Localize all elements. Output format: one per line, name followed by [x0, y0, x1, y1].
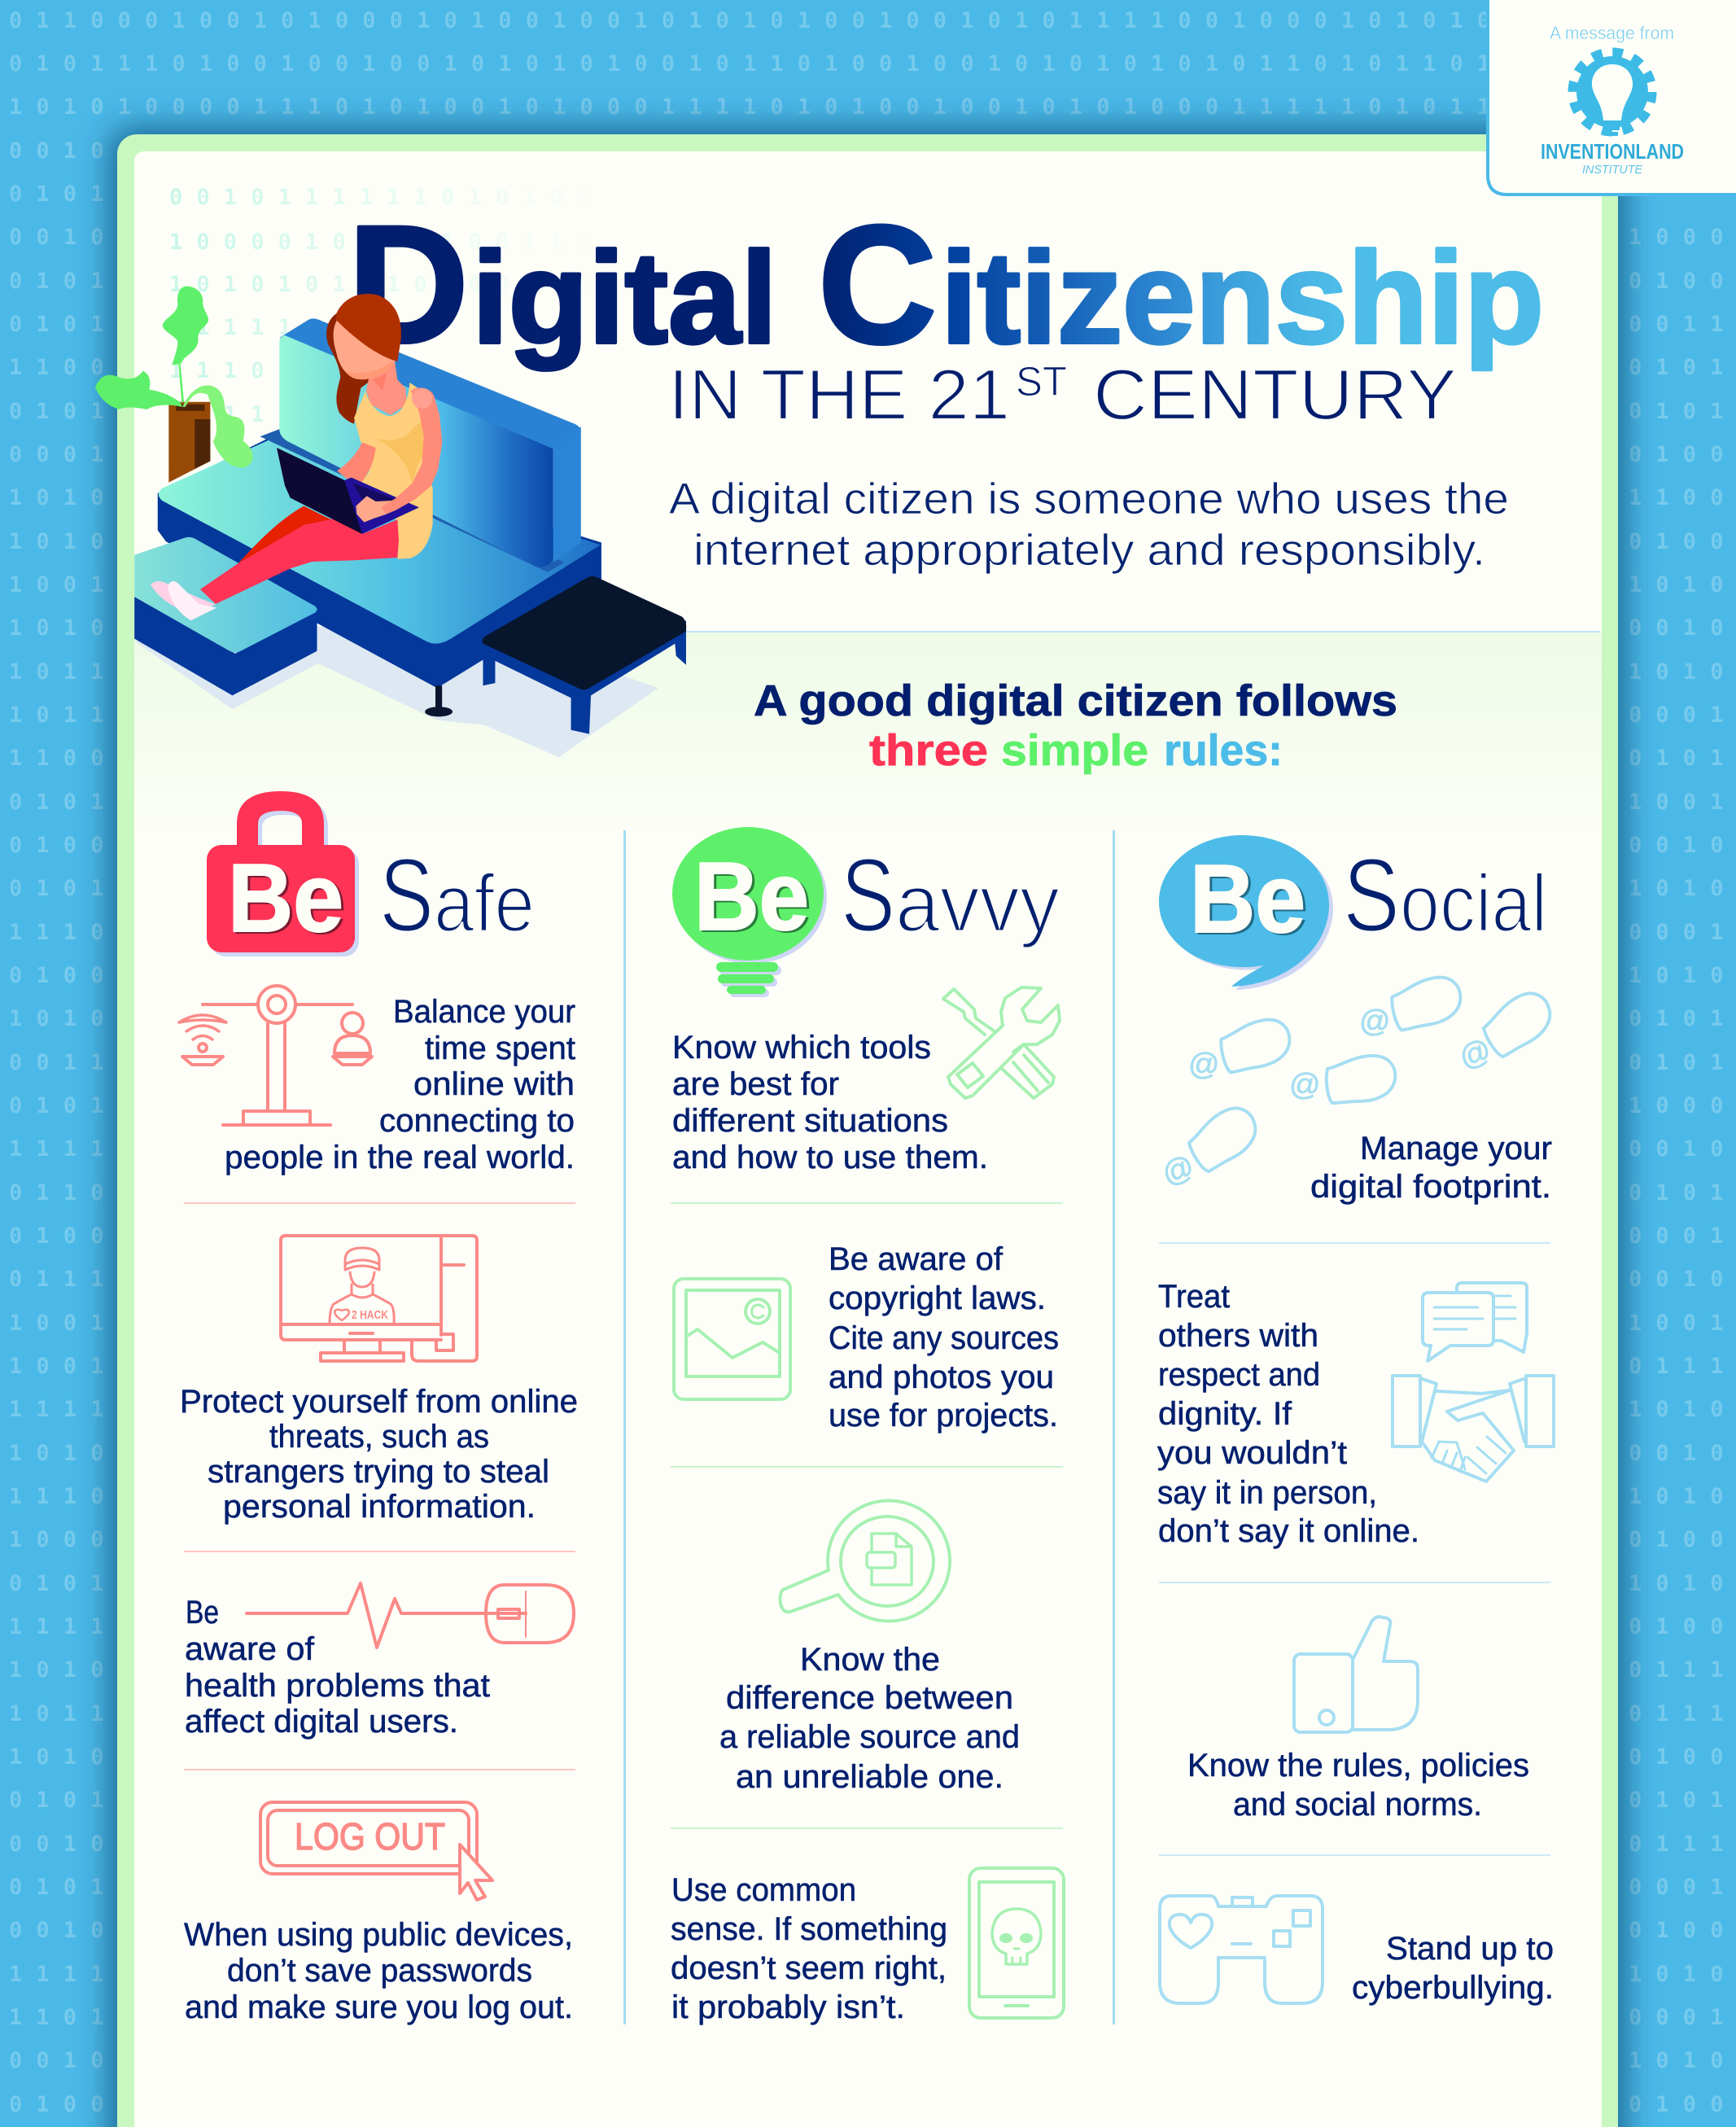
heading: social: ocial [1400, 858, 1547, 949]
binary pattern: right column: 0010 [1629, 615, 1736, 641]
heading: safe: S [379, 838, 434, 954]
panel: be safe [179, 791, 578, 2025]
text: respect [1157, 1279, 1419, 1549]
icon: log out button [260, 1802, 492, 1900]
binary pattern: left column: 0010 [9, 225, 118, 250]
text: copyright: and photos you [829, 1359, 1054, 1395]
binary pattern: left column: 0101 [9, 1571, 118, 1596]
binary pattern: left column: 0100 [9, 1223, 118, 1249]
text: reliable: difference between [726, 1680, 1013, 1716]
binary pattern: right column: 0100 [1629, 1744, 1736, 1770]
binary pattern: right column: 0100 [1629, 1527, 1736, 1552]
subtitle: IN THE 21 [668, 354, 1010, 435]
panel: be savvy [671, 827, 1064, 2025]
rules heading: rules: [1164, 726, 1283, 775]
text: common sense [671, 1872, 947, 2025]
badge: light bulb: Be [694, 842, 809, 951]
text: protect: strangers trying to steal [208, 1454, 549, 1490]
binary pattern: right column: 0101 [1629, 1050, 1736, 1075]
text: protect: personal information. [223, 1489, 536, 1525]
binary pattern: right column: 0101 [1629, 355, 1736, 380]
heading: safe [379, 838, 535, 954]
intro text [669, 475, 1509, 575]
binary pattern: top rows [9, 8, 1504, 120]
text: footprint [1310, 1131, 1552, 1205]
text: health: affect digital users. [185, 1704, 458, 1740]
binary pattern: left column: 1101 [9, 2005, 118, 2030]
text: common sense: Use common [671, 1872, 856, 1908]
binary pattern: left column: 0101 [9, 399, 118, 424]
binary pattern: right column: 1010 [1629, 963, 1736, 988]
icon: thumbs up [1294, 1617, 1418, 1732]
badge: light bulb [672, 827, 827, 997]
binary pattern: right column: 0011 [1629, 312, 1736, 337]
icon: digital footprints: @ [1157, 1149, 1199, 1192]
binary pattern: right column: 1001 [1629, 1311, 1736, 1336]
text: protect: Protect yourself from online [180, 1384, 578, 1420]
text: respect: others with [1158, 1318, 1318, 1354]
icon: hacker monitor [281, 1236, 477, 1361]
binary pattern: left column: 1010 [9, 1441, 118, 1466]
binary pattern: right column: 1000 [1629, 225, 1736, 250]
backrest top [279, 318, 581, 449]
binary pattern: left column: 0011 [9, 1050, 118, 1075]
binary pattern: right column: 0101 [1629, 1006, 1736, 1031]
card inner panel [134, 151, 1602, 2127]
sofa foot [425, 685, 453, 716]
text: respect: dignity. If [1158, 1396, 1292, 1432]
text: log out: When using public devices, [184, 1917, 573, 1953]
binary pattern: right column: 0100 [1629, 1918, 1736, 1943]
badge: lock: Be [228, 844, 343, 952]
binary pattern: right column: 1010 [1629, 659, 1736, 685]
subtitle: CENTURY [1093, 354, 1457, 435]
binary pattern: right column: 1000 [1629, 1093, 1736, 1118]
binary pattern: right column: 0001 [1629, 2005, 1736, 2030]
badge: speech bubble: Be [1190, 845, 1305, 953]
text: copyright: Cite any sources [829, 1320, 1059, 1356]
backrest front [279, 335, 553, 567]
text: tools: and how to use them. [672, 1140, 988, 1175]
binary pattern: left column: 0101 [9, 1093, 118, 1118]
icon: log out button: LOG OUT [295, 1815, 445, 1858]
icon: copyright image [674, 1279, 790, 1399]
binary pattern: top rows: 0110001001010001010010010101010010010101111001000101010 [9, 8, 1504, 33]
binary pattern: right column: 0001 [1629, 702, 1736, 728]
text: reliable: a reliable source and [719, 1719, 1020, 1755]
icon: wrench and screwdriver [943, 987, 1060, 1098]
icon: digital footprints [1157, 974, 1559, 1192]
binary pattern: left column: 1011 [9, 659, 118, 685]
logo box [1488, 0, 1736, 195]
text: respect: say it in person, [1157, 1475, 1377, 1511]
binary pattern: right column: 1010 [1629, 572, 1736, 597]
binary pattern: right column [1629, 225, 1736, 2117]
subtitle [668, 354, 1457, 435]
sofa and furniture [95, 318, 686, 757]
intro text: A digital citizen is someone who uses the [669, 475, 1509, 523]
title: D [348, 190, 469, 379]
heading: social [1343, 838, 1547, 954]
binary pattern: left column: 1001 [9, 1311, 118, 1336]
binary pattern: left column: 1011 [9, 1701, 118, 1727]
binary pattern: left column: 0010 [9, 1832, 118, 1857]
binary pattern: left column: 1000 [9, 1527, 118, 1552]
binary pattern: right column: 0111 [1629, 1701, 1736, 1727]
binary pattern: top rows: 0101110100100100101010100101101001001010101010110101101 [9, 51, 1504, 77]
laptop screen [277, 448, 362, 534]
faint binary pattern in card: 10101010101001010 [169, 272, 632, 297]
binary pattern: left column: 1010 [9, 1006, 118, 1031]
text: cyberbullying: Stand up to [1386, 1931, 1554, 1967]
faint binary pattern in card [169, 185, 713, 427]
faint binary pattern in card: 10110011101 [169, 402, 468, 427]
neck [366, 361, 407, 415]
intro text: internet appropriately and responsibly. [693, 526, 1485, 575]
binary pattern: right column: 0001 [1629, 1223, 1736, 1249]
icon: heartbeat mouse [247, 1583, 574, 1648]
binary pattern: right column: 0100 [1629, 1614, 1736, 1639]
heading: social: S [1343, 838, 1400, 954]
text: cyberbullying: cyberbullying. [1352, 1970, 1554, 2006]
icon: chat bubbles [1423, 1283, 1527, 1361]
binary pattern: right column: 0101 [1629, 746, 1736, 771]
icon: digital footprints: @ [1454, 1033, 1496, 1075]
text: copyright: copyright laws. [829, 1280, 1046, 1316]
binary pattern: left column: 0110 [9, 1180, 118, 1206]
badge: light bulb: Be [697, 844, 811, 952]
binary pattern: left column: 0101 [9, 269, 118, 294]
badge: lock [207, 791, 359, 956]
binary pattern: right column: 0101 [1629, 1180, 1736, 1206]
binary pattern: right column: 0010 [1629, 833, 1736, 858]
ottoman [134, 537, 317, 695]
pot [168, 402, 210, 483]
title [348, 190, 1544, 379]
binary pattern: left column: 0100 [9, 833, 118, 858]
sofa base [158, 434, 601, 688]
column dividers [623, 830, 1115, 2024]
feet [151, 581, 216, 620]
logo institute: INSTITUTE [1582, 163, 1643, 177]
binary pattern: left column: 1100 [9, 746, 118, 771]
binary pattern: left column: 0101 [9, 790, 118, 815]
floor shadow [134, 626, 658, 757]
binary pattern: left column: 0101 [9, 876, 118, 901]
binary pattern: left column: 1111 [9, 1136, 118, 1162]
text: balance: time spent [425, 1031, 575, 1066]
text: footprint: digital footprint. [1310, 1169, 1551, 1205]
badge: lock: Be [230, 846, 346, 954]
binary pattern: left column: 0101 [9, 1788, 118, 1813]
icon: skull tablet [969, 1868, 1064, 2018]
binary pattern: left column: 1010 [9, 1657, 118, 1683]
binary pattern: left column: 0010 [9, 138, 118, 164]
text: respect: you wouldn’t [1157, 1435, 1347, 1471]
icon: balance scale [179, 986, 372, 1125]
text: tools: are best for [672, 1066, 839, 1102]
hair top [336, 294, 401, 361]
binary pattern: right column: 0100 [1629, 529, 1736, 554]
binary pattern: right column: 1100 [1629, 485, 1736, 510]
faint binary pattern in card: 1110100101 [169, 358, 441, 383]
face [334, 320, 396, 379]
binary pattern: right column: 1010 [1629, 1397, 1736, 1422]
binary pattern: left column: 0101 [9, 312, 118, 337]
logo wordmark: INVENTIONLAND [1541, 139, 1684, 164]
far arm [381, 388, 442, 514]
binary pattern: left column: 1111 [9, 1614, 118, 1639]
binary pattern: left column: 1111 [9, 1397, 118, 1422]
binary pattern: left column: 1110 [9, 1484, 118, 1509]
heading: savvy: avvy [895, 858, 1060, 949]
text: reliable: Know the [800, 1642, 940, 1678]
binary pattern: right column: 1010 [1629, 876, 1736, 901]
title: C [818, 190, 937, 379]
text: tools [672, 1030, 988, 1175]
binary pattern: right column: 0101 [1629, 1788, 1736, 1813]
text: norms [1187, 1748, 1529, 1823]
text: respect: respect and [1158, 1357, 1320, 1393]
text: balance: Balance your [393, 994, 575, 1030]
faint binary pattern in card: 00101111110101001110 [169, 185, 713, 210]
binary pattern: right column: 0001 [1629, 1875, 1736, 1900]
text: common sense: it probably isn’t. [671, 1989, 905, 2025]
faint binary pattern in card: 1111101 [169, 315, 360, 340]
text: balance [225, 994, 575, 1175]
binary pattern: left column: 1010 [9, 615, 118, 641]
text: copyright [829, 1241, 1059, 1433]
binary pattern: right column: 0101 [1629, 399, 1736, 424]
heading: savvy [841, 838, 1060, 954]
binary pattern: top rows: 1010100001110101001010001111010100100101010001111101011 [9, 94, 1504, 120]
text: health [185, 1595, 490, 1740]
text: balance: connecting to [379, 1103, 575, 1139]
binary pattern: right column: 1001 [1629, 790, 1736, 815]
binary pattern: left column: 0101 [9, 1875, 118, 1900]
binary pattern: right column: 0111 [1629, 1354, 1736, 1379]
title: itizenship [941, 225, 1544, 370]
text: tools: different situations [672, 1103, 948, 1139]
text: footprint: Manage your [1360, 1131, 1552, 1166]
badge: speech bubble: Be [1192, 847, 1308, 955]
text: protect [180, 1384, 578, 1525]
text: log out: and make sure you log out. [185, 1989, 573, 2025]
binary pattern: right column: 0111 [1629, 1657, 1736, 1683]
binary pattern: left column: 1001 [9, 1354, 118, 1379]
heading: safe: afe [434, 858, 535, 949]
text: common sense: doesn’t seem right, [671, 1950, 947, 1986]
left and right plant leaves [95, 371, 253, 467]
text: protect: threats, such as [269, 1419, 489, 1455]
binary pattern: left column: 0100 [9, 2092, 118, 2117]
binary pattern: right column: 1010 [1629, 1484, 1736, 1509]
text: health: aware of [185, 1631, 315, 1667]
text: health: health problems that [185, 1668, 490, 1704]
binary pattern: right column: 1010 [1629, 1571, 1736, 1596]
binary pattern: left column: 1010 [9, 529, 118, 554]
text: log out: don’t save passwords [227, 1953, 532, 1989]
plant and woman [163, 287, 442, 604]
binary pattern: right column: 0010 [1629, 1267, 1736, 1292]
binary pattern: right column: 0100 [1629, 442, 1736, 467]
text: health: Be [186, 1595, 219, 1630]
icon: digital footprints: @ [1359, 1004, 1391, 1039]
tall leaf [163, 287, 208, 403]
rules heading: simple [1001, 726, 1148, 775]
binary pattern: right column: 0111 [1629, 1832, 1736, 1857]
binary pattern: left column: 1110 [9, 920, 118, 945]
text: norms: and social norms. [1233, 1787, 1482, 1823]
rules heading: three [869, 726, 988, 775]
logo label: A message from [1550, 23, 1674, 43]
binary pattern: right column: 0001 [1629, 920, 1736, 945]
text: log out [184, 1917, 573, 2025]
sofa seat [159, 436, 601, 644]
text: respect: don’t say it online. [1158, 1513, 1419, 1549]
laptop keyboard [344, 478, 419, 534]
rules heading: A good digital citizen follows [754, 676, 1397, 725]
binary pattern: left column: 1111 [9, 1962, 118, 1987]
binary pattern: left column [9, 138, 118, 2117]
icon: hacker monitor: 2 HACK [352, 1308, 388, 1322]
icon: handshake [1393, 1376, 1554, 1481]
icon: magnifier [780, 1500, 950, 1621]
rules heading [754, 676, 1397, 775]
faint binary pattern in card: 10000101001001110010 [169, 230, 713, 255]
heading: savvy: S [841, 838, 895, 954]
binary pattern: right column: 0100 [1629, 2092, 1736, 2117]
binary pattern: right column: 0010 [1629, 1136, 1736, 1162]
icon: game controller [1160, 1896, 1323, 2003]
hand [356, 496, 392, 523]
binary pattern: left column: 0100 [9, 963, 118, 988]
text: tools: Know which tools [672, 1030, 931, 1066]
binary pattern: left column: 0010 [9, 1918, 118, 1943]
badge: speech bubble [1159, 835, 1333, 990]
back hair [326, 313, 372, 424]
binary pattern: right column: 0100 [1629, 269, 1736, 294]
binary pattern: left column: 0111 [9, 1267, 118, 1292]
text: copyright: use for projects. [829, 1398, 1058, 1433]
text: balance: people in the real world. [225, 1140, 575, 1175]
binary pattern: right column: 0010 [1629, 1441, 1736, 1466]
binary pattern: right column: 1010 [1629, 1962, 1736, 1987]
binary pattern: left column: 1011 [9, 702, 118, 728]
dark leg [238, 506, 362, 564]
binary pattern: left column: 0010 [9, 2048, 118, 2073]
near arm [337, 442, 376, 483]
text: respect: Treat [1158, 1279, 1230, 1315]
text: common sense: sense. If something [671, 1911, 947, 1947]
subtitle: ST [1016, 358, 1067, 405]
illustration: woman on sofa [95, 287, 686, 757]
binary pattern: left column: 1001 [9, 572, 118, 597]
panel: be social [1157, 835, 1559, 2006]
binary pattern: left column: 1010 [9, 485, 118, 510]
binary pattern: left column: 0001 [9, 442, 118, 467]
text: reliable: an unreliable one. [736, 1759, 1004, 1795]
icon: digital footprints: @ [1188, 1048, 1220, 1082]
logo gear with bulb [1574, 54, 1651, 136]
bright leg [200, 519, 399, 604]
text: norms: Know the rules, policies [1187, 1748, 1529, 1783]
title: igital [472, 225, 777, 370]
binary pattern: left column: 0101 [9, 182, 118, 207]
text: copyright: Be aware of [829, 1241, 1004, 1277]
binary pattern: left column: 1010 [9, 1744, 118, 1770]
text: reliable [719, 1642, 1020, 1795]
binary pattern: right column: 1010 [1629, 2048, 1736, 2073]
side table [482, 576, 686, 734]
text: cyberbullying [1352, 1931, 1554, 2006]
text: balance: online with [413, 1066, 575, 1102]
binary pattern: left column: 1100 [9, 355, 118, 380]
dress [354, 383, 433, 559]
icon: digital footprints: @ [1289, 1068, 1321, 1102]
